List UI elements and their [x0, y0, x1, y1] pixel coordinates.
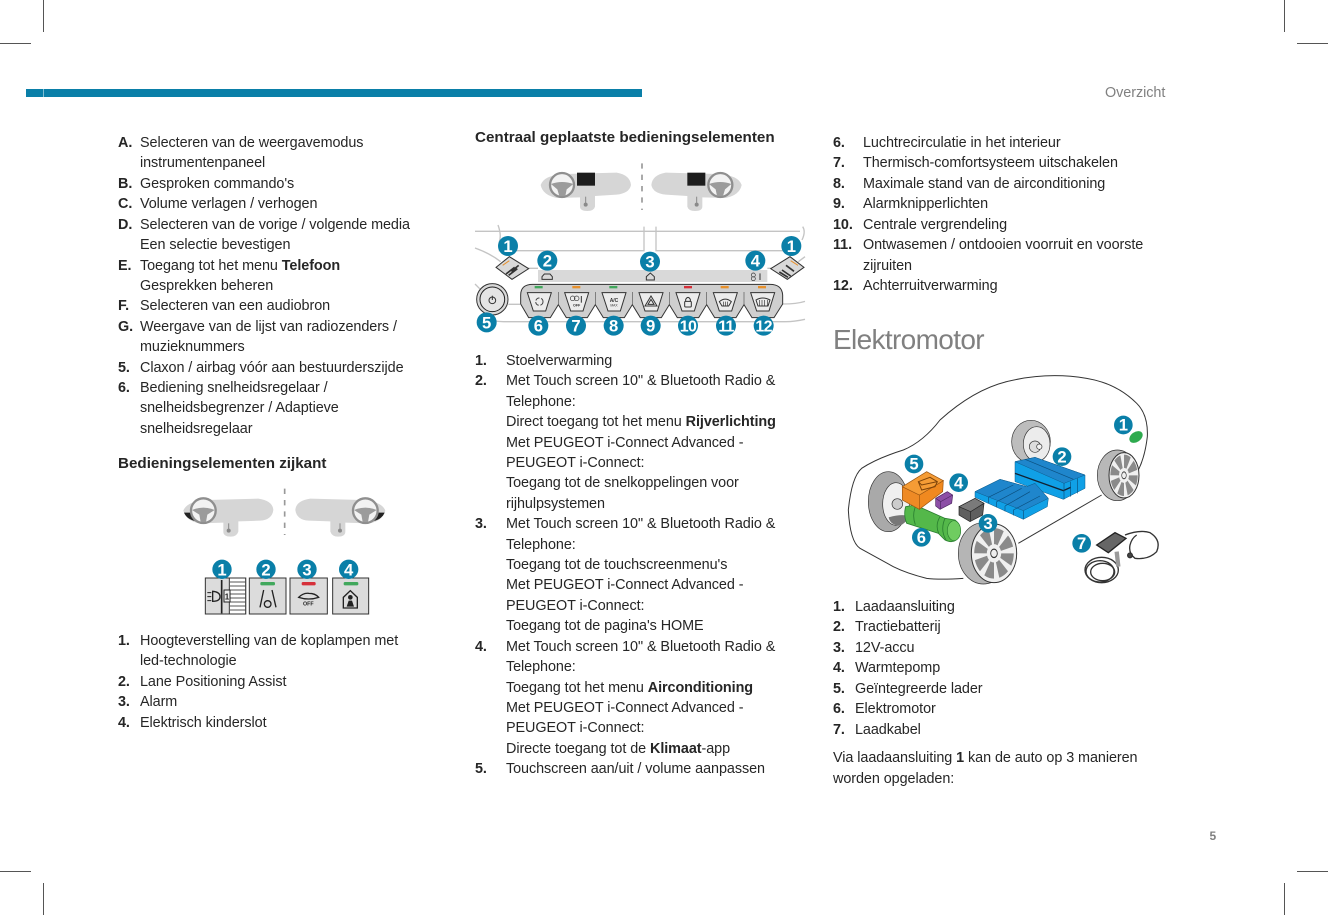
badges 1-12: 9	[646, 317, 655, 336]
diagram: electric car components	[848, 375, 1159, 584]
list: electric motor legend: 1.	[833, 599, 845, 615]
list: central control legend continued: Ontwasemen / ontdooien voorruit en voorste	[863, 237, 1143, 253]
list: central control legend: 3.	[475, 516, 487, 532]
badges 1-7: 3	[983, 514, 993, 533]
list: central control legend: Met PEUGEOT i-Connect Advanced -	[506, 700, 743, 716]
list: central control legend: Toegang tot het menu Airconditioning	[506, 680, 753, 696]
badges 1-4: 3	[302, 560, 312, 579]
button 4: child lock	[333, 578, 369, 614]
badges 1-7: 6	[917, 528, 926, 547]
icon: seat heating left	[496, 257, 529, 279]
list: central control legend: Met Touch screen 10" & Bluetooth Radio &	[506, 373, 775, 389]
text block: steering wheel controls A to 6: muzieknummers	[140, 339, 245, 355]
list: central control legend: 4.	[475, 639, 487, 655]
list: central control legend continued: 9.	[833, 196, 845, 212]
badges 1-7: 1	[1119, 416, 1128, 435]
text block: steering wheel controls A to 6: snelheidsbegrenzer / Adaptieve	[140, 400, 339, 416]
heading: Centraal geplaatste bedieningselementen: Centraal geplaatste bedieningselementen	[475, 129, 775, 146]
text block: steering wheel controls A to 6: F.	[118, 298, 129, 314]
list: central control legend: 1.	[475, 353, 487, 369]
list: central control legend continued: Achterruitverwarming	[863, 278, 998, 294]
list: central control legend continued: 10.	[833, 217, 853, 233]
list: central control legend: PEUGEOT i-Connect:	[506, 598, 644, 614]
12V battery	[959, 498, 984, 522]
car outline	[848, 376, 1147, 579]
text block: steering wheel controls A to 6: Gesproken commando's	[140, 176, 294, 192]
front far wheel	[868, 472, 909, 532]
charging port	[1127, 429, 1145, 445]
text block: steering wheel controls A to 6: Gesprekken beheren	[140, 278, 273, 294]
list: side control legend: 2.	[118, 674, 130, 690]
list: electric motor legend: 5.	[833, 681, 845, 697]
list: central control legend continued: 6.	[833, 135, 845, 151]
list: side control legend: Lane Positioning Assist	[140, 674, 286, 690]
section label: Overzicht: Overzicht	[1105, 85, 1165, 101]
icon: left-hand drive dashboard	[183, 498, 273, 537]
text block: steering wheel controls A to 6: Selecteren van de vorige / volgende media	[140, 217, 410, 233]
rear near wheel	[1097, 450, 1139, 501]
list: central control legend continued: zijruiten	[863, 258, 912, 274]
badges 1-12: 1	[787, 237, 796, 256]
touchscreen shortcut strip	[538, 270, 767, 282]
badges 1-12: 2	[543, 252, 552, 271]
list: central control legend: Toegang tot de touchscreenmenu's	[506, 557, 727, 573]
list: central control legend: Directe toegang tot de Klimaat-app	[506, 741, 730, 757]
list: electric motor legend	[833, 599, 982, 738]
badges 1-4: 2	[261, 560, 271, 579]
text block: steering wheel controls A to 6: Toegang tot het menu Telefoon	[140, 258, 340, 274]
badges 1-4: 1	[217, 560, 227, 579]
text block: steering wheel controls A to 6: A.	[118, 135, 132, 151]
badges 1-7: 5	[909, 455, 919, 474]
list: central control legend: Telephone:	[506, 394, 576, 410]
list: central control legend continued	[833, 135, 1143, 294]
button 1: headlamp adjustment: 1	[225, 592, 230, 601]
badges 1-12: 8	[609, 317, 618, 336]
list: side control legend: 3.	[118, 694, 130, 710]
badges 1-12: 7	[571, 317, 581, 336]
text block: steering wheel controls A to 6: E.	[118, 258, 131, 274]
text block: steering wheel controls A to 6: Claxon / airbag vóór aan bestuurderszijde	[140, 360, 404, 376]
page number: 5	[1210, 829, 1216, 843]
text block: steering wheel controls A to 6: Volume verlagen / verhogen	[140, 196, 317, 212]
text block: steering wheel controls A to 6: Bediening snelheidsregelaar /	[140, 380, 328, 396]
list: electric motor legend: 2.	[833, 619, 845, 635]
text block: steering wheel controls A to 6: B.	[118, 176, 132, 192]
badges 1-7: 7	[1077, 534, 1086, 553]
front near wheel	[958, 523, 1017, 584]
text block: steering wheel controls A to 6: 6.	[118, 380, 130, 396]
list: central control legend continued: 11.	[833, 237, 852, 253]
list: central control legend: Direct toegang tot het menu Rijverlichting	[506, 414, 776, 430]
list: central control legend: Toegang tot de pagina's HOME	[506, 618, 704, 634]
badges 1-12: 4	[751, 252, 761, 271]
list: side control legend	[118, 633, 398, 731]
text block: steering wheel controls A to 6: Een selectie bevestigen	[140, 237, 290, 253]
list: central control legend	[475, 353, 776, 777]
list: electric motor legend: Laadkabel	[855, 722, 921, 738]
list: central control legend: Stoelverwarming	[506, 353, 612, 369]
text block: steering wheel controls A to 6: Selecteren van de weergavemodus	[140, 135, 363, 151]
integrated charger	[902, 472, 943, 509]
list: central control legend continued: Alarmknipperlichten	[863, 196, 988, 212]
list: central control legend continued: 7.	[833, 155, 845, 171]
list: central control legend continued: Luchtrecirculatie in het interieur	[863, 135, 1061, 151]
text block: steering wheel controls A to 6: instrumentenpaneel	[140, 155, 265, 171]
list: electric motor legend: Elektromotor	[855, 701, 936, 717]
button row 6-12: A/C	[610, 298, 619, 304]
list: electric motor legend: 7.	[833, 722, 845, 738]
list: side control legend: Alarm	[140, 694, 177, 710]
list: central control legend: Telephone:	[506, 537, 576, 553]
list: central control legend: Touchscreen aan/uit / volume aanpassen	[506, 761, 765, 777]
list: central control legend: 5.	[475, 761, 487, 777]
rear far wheel	[1012, 420, 1050, 463]
badges 1-12	[477, 236, 801, 336]
list: electric motor legend: Warmtepomp	[855, 660, 940, 676]
list: electric motor legend: 3.	[833, 640, 845, 656]
heat pump	[936, 492, 953, 509]
badges 1-4: 4	[344, 560, 354, 579]
button row 6-12	[521, 284, 783, 318]
text block: steering wheel controls A to 6: Selecteren van een audiobron	[140, 298, 330, 314]
button: power	[477, 284, 508, 315]
list: central control legend: Met Touch screen 10" & Bluetooth Radio &	[506, 516, 775, 532]
text block: steering wheel controls A to 6: snelheidsregelaar	[140, 421, 252, 437]
text block: steering wheel controls A to 6: Weergave van de lijst van radiozenders /	[140, 319, 397, 335]
badges 1-12: 5	[482, 313, 491, 332]
badges 1-12: 11	[718, 319, 735, 336]
list: central control legend: Met Touch screen 10" & Bluetooth Radio &	[506, 639, 775, 655]
list: electric motor legend: Laadaansluiting	[855, 599, 955, 615]
button 3: alarm	[290, 578, 327, 614]
electric motor	[905, 505, 961, 542]
list: side control legend: 4.	[118, 715, 130, 731]
list: side control legend: Elektrisch kinderslot	[140, 715, 266, 731]
text block: steering wheel controls A to 6: C.	[118, 196, 132, 212]
list: central control legend: PEUGEOT i-Connect:	[506, 720, 644, 736]
list: central control legend: Met PEUGEOT i-Connect Advanced -	[506, 435, 743, 451]
list: central control legend: PEUGEOT i-Connect:	[506, 455, 644, 471]
list: electric motor legend: 4.	[833, 660, 845, 676]
list: side control legend: Hoogteverstelling van de koplampen met	[140, 633, 398, 649]
list: side control legend: led-technologie	[140, 653, 237, 669]
paragraph: charging intro: Via laadaansluiting 1 kan de auto op 3 manieren	[833, 750, 1137, 766]
button 1: headlamp adjustment	[205, 578, 246, 614]
list: central control legend: Telephone:	[506, 659, 576, 675]
button 3: alarm: OFF	[303, 601, 314, 607]
list: central control legend: Toegang tot de snelkoppelingen voor	[506, 475, 739, 491]
paragraph: charging intro	[833, 750, 1137, 787]
icon: seat heating right	[771, 257, 804, 279]
list: central control legend continued: 12.	[833, 278, 853, 294]
icon: right-hand drive dashboard	[295, 498, 385, 537]
list: central control legend: Met PEUGEOT i-Connect Advanced -	[506, 577, 743, 593]
list: central control legend: 2.	[475, 373, 487, 389]
text block: steering wheel controls A to 6	[118, 135, 410, 437]
heading: Bedieningselementen zijkant: Bedieningselementen zijkant	[118, 455, 326, 472]
icon: left-hand drive dashboard	[541, 173, 631, 211]
console outline	[475, 225, 805, 322]
paragraph: charging intro: worden opgeladen:	[833, 771, 954, 787]
list: central control legend continued: Thermisch-comfortsysteem uitschakelen	[863, 155, 1118, 171]
button row 6-12: OFF	[573, 304, 581, 308]
badges 1-7: 4	[954, 473, 964, 492]
diagram: central controls	[474, 163, 806, 336]
list: side control legend: 1.	[118, 633, 130, 649]
diagram: side controls location and buttons	[183, 488, 386, 614]
text block: steering wheel controls A to 6: G.	[118, 319, 133, 335]
list: electric motor legend: 12V-accu	[855, 640, 914, 656]
button row 6-12: MAX	[610, 304, 618, 308]
text block: steering wheel controls A to 6: D.	[118, 217, 132, 233]
list: central control legend continued: Centrale vergrendeling	[863, 217, 1007, 233]
badges 1-7: 2	[1057, 447, 1067, 466]
text block: steering wheel controls A to 6: 5.	[118, 360, 130, 376]
badges 1-12: 3	[645, 253, 655, 272]
charging cable	[1085, 531, 1158, 583]
header bar	[26, 89, 642, 97]
list: central control legend continued: 8.	[833, 176, 845, 192]
badges 1-12: 10	[680, 319, 697, 336]
badges 1-12: 1	[503, 237, 513, 256]
badges 1-7	[905, 416, 1133, 553]
badges 1-12: 6	[534, 317, 543, 336]
list: electric motor legend: Tractiebatterij	[855, 619, 941, 635]
traction battery	[975, 457, 1085, 519]
heading: Elektromotor: Elektromotor	[833, 324, 984, 355]
badges 1-12: 12	[755, 319, 773, 336]
list: central control legend: rijhulpsystemen	[506, 496, 605, 512]
list: central control legend continued: Maximale stand van de airconditioning	[863, 176, 1105, 192]
list: electric motor legend: Geïntegreerde lader	[855, 681, 982, 697]
badges 1-4	[212, 560, 358, 579]
list: electric motor legend: 6.	[833, 701, 845, 717]
button 2: lane positioning	[249, 578, 286, 614]
icon: right-hand drive dashboard	[651, 173, 742, 211]
